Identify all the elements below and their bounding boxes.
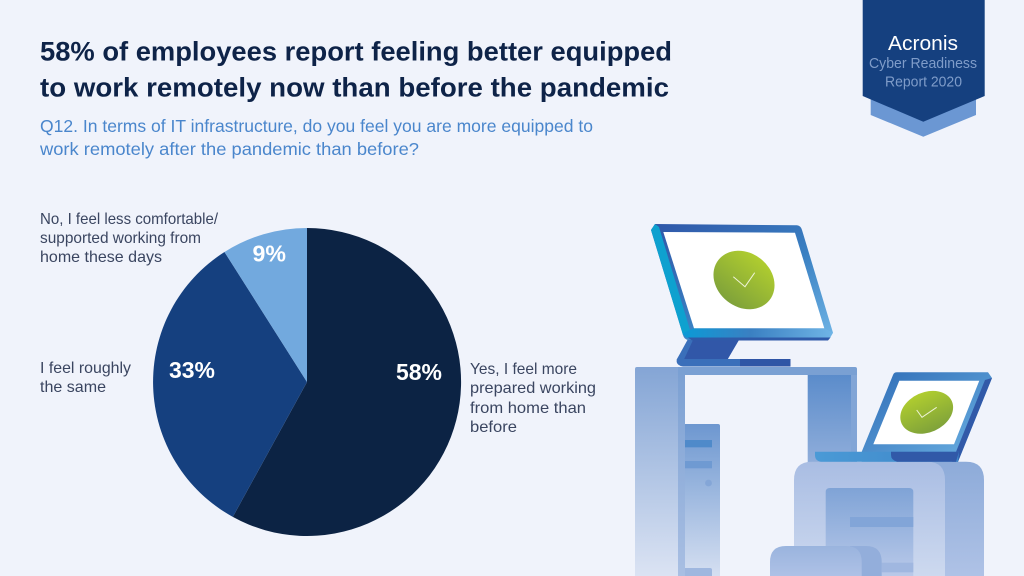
value labels: 33% (169, 357, 215, 383)
title: to work remotely now than before the pandemic (40, 73, 669, 103)
slice: no 9% (224, 228, 307, 382)
label: same: the same (40, 379, 106, 396)
label: no (40, 211, 219, 266)
label: yes: prepared working (470, 380, 596, 397)
title: 58% of employees report feeling better equipped (40, 36, 672, 66)
value labels (169, 241, 442, 385)
label: yes (470, 361, 596, 436)
chair (770, 546, 882, 576)
subtitle question (39, 116, 593, 159)
title (40, 36, 672, 103)
label: yes: Yes, I feel more (470, 361, 577, 378)
slice: yes 58% (233, 228, 461, 536)
illustration: monitor (651, 224, 833, 366)
badge: Acronis report: Report 2020 (885, 74, 962, 90)
illustration: cabinet and chair (770, 462, 984, 576)
label: yes: before (470, 419, 517, 436)
label: same: I feel roughly (40, 360, 131, 377)
label: yes: from home than (470, 400, 586, 417)
illustration: laptop (815, 372, 992, 462)
label: same (40, 360, 131, 396)
subtitle question: Q12. In terms of IT infrastructure, do you feel you are more equipped to (40, 116, 593, 136)
label: no: home these days (40, 249, 162, 266)
stand (676, 339, 790, 366)
slice: same 33% (153, 252, 307, 517)
illustration: desk with tower (635, 367, 857, 576)
subtitle question: work remotely after the pandemic than before? (39, 139, 419, 159)
badge: Acronis report: Acronis (888, 33, 958, 55)
badge: Acronis report (863, 0, 985, 137)
icon: green check (702, 239, 786, 321)
value labels: 9% (252, 241, 286, 267)
badge: Acronis report: Cyber Readiness (869, 55, 977, 72)
label: no: supported working from (40, 230, 201, 247)
icon: green check laptop (893, 383, 960, 442)
tower (685, 424, 720, 576)
pie chart (153, 228, 461, 536)
value labels: 58% (396, 359, 442, 385)
label: no: No, I feel less comfortable/ (40, 211, 219, 228)
